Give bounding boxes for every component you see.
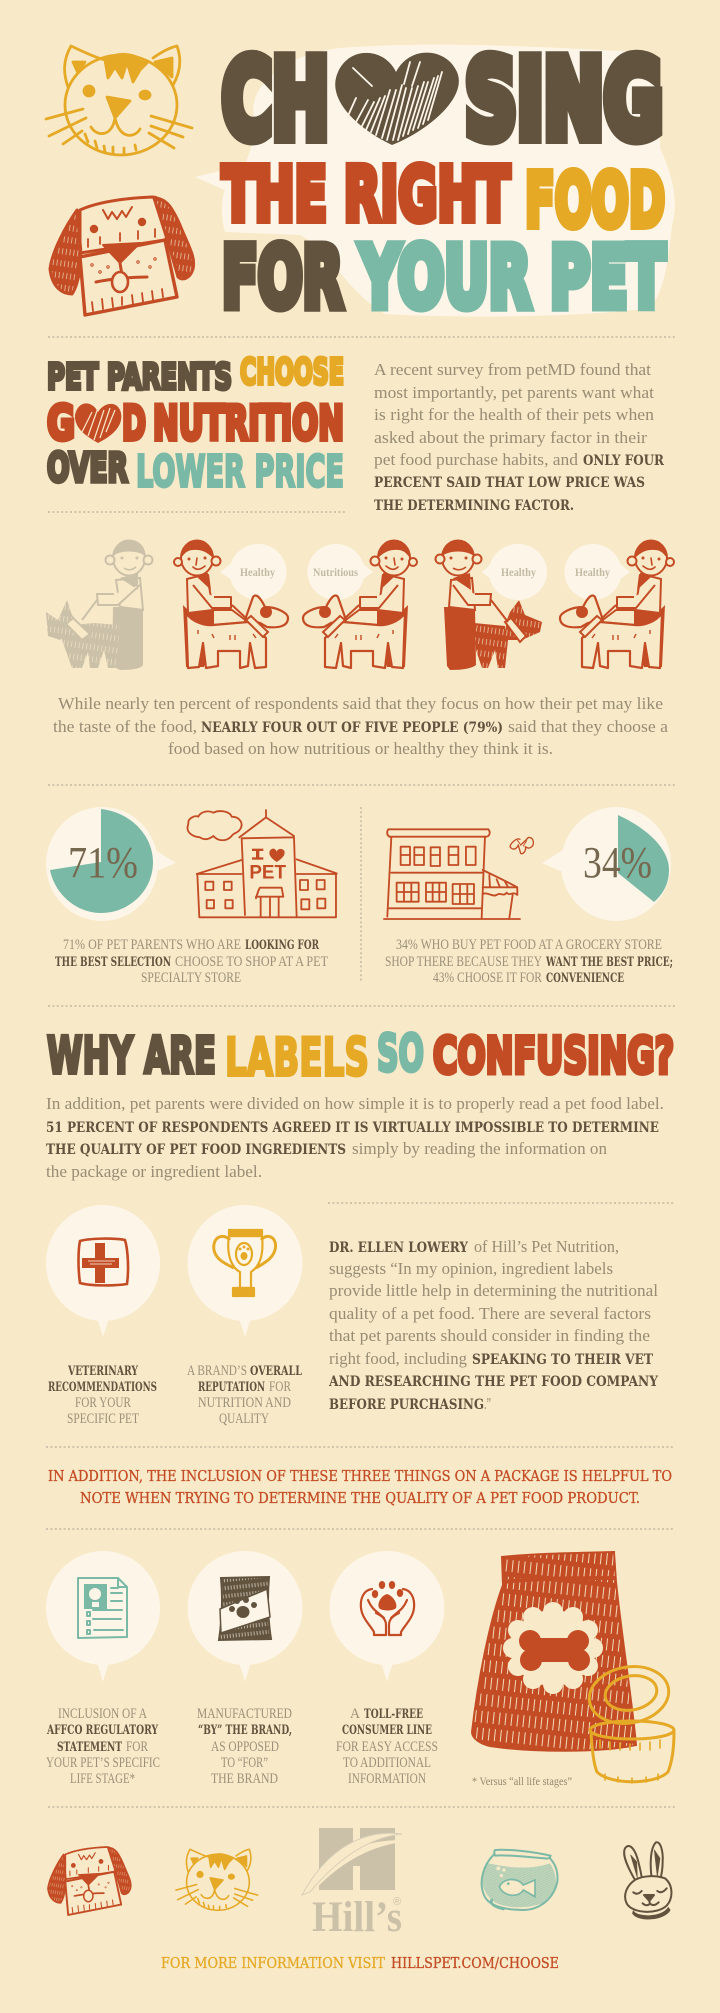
footer link: FOR MORE INFORMATION VISIT — [161, 1956, 385, 1972]
caption: 34 percent: SHOP THERE BECAUSE THEY — [385, 954, 542, 970]
heading: why are labels so confusing: LABELS — [225, 1028, 369, 1088]
icon: fish bowl — [482, 1850, 558, 1910]
heading: pet parents choose good nutrition: LOWER PRICE — [136, 446, 344, 498]
figure: person with dark dog and speech bubble healthy: Healthy — [501, 565, 536, 579]
icon: bone — [519, 1630, 590, 1671]
icon: rabbit — [624, 1842, 671, 1919]
paragraph: labels: simply by reading the information on — [352, 1139, 607, 1158]
caption: manufactured: THE BRAND — [211, 1771, 278, 1787]
caption: brand reputation: REPUTATION — [198, 1380, 265, 1395]
caption: toll-free — [336, 1706, 438, 1787]
caption: brand reputation: QUALITY — [219, 1411, 269, 1427]
caption: toll-free: INFORMATION — [348, 1771, 426, 1787]
icon: hands and paw — [361, 1581, 414, 1635]
paragraph: four out of five: said that they choose a — [508, 717, 668, 736]
quote: Dr. Ellen Lowery: AND RESEARCHING THE PET FOOD COMPANY — [328, 1374, 659, 1390]
figure: grey person with dog — [46, 540, 152, 670]
quote: Dr. Ellen Lowery: BEFORE PURCHASING — [329, 1397, 484, 1413]
paragraph: labels — [46, 1094, 664, 1181]
caption: brand reputation: OVERALL — [250, 1364, 302, 1379]
caption: veterinary: FOR YOUR — [75, 1395, 131, 1411]
caption: veterinary — [48, 1364, 157, 1427]
caption: manufactured: MANUFACTURED — [197, 1706, 292, 1722]
paragraph: labels: THE QUALITY OF PET FOOD INGREDIENTS — [46, 1142, 346, 1158]
quote: Dr. Ellen Lowery: provide little help in determining the nutritional — [329, 1281, 658, 1300]
logo: Hill's: Hill’s — [312, 1894, 402, 1941]
footer link — [161, 1956, 559, 1972]
caption: manufactured — [197, 1706, 292, 1787]
quote: Dr. Ellen Lowery: quality of a pet food. There are several factors — [329, 1304, 651, 1323]
figure: person, dog and speech bubble healthy: Healthy — [240, 565, 275, 579]
caption: 71 percent: 71% OF PET PARENTS WHO ARE — [63, 937, 241, 953]
caption: brand reputation: A BRAND’S — [187, 1363, 247, 1379]
callout: three things on a package — [48, 1469, 672, 1507]
bubble: veterinary recommendations — [46, 1205, 160, 1337]
pie chart: 34 percent — [542, 807, 671, 921]
caption: 71 percent: LOOKING FOR — [245, 938, 319, 953]
icon: can — [585, 1660, 674, 1783]
caption: 71 percent: CHOOSE TO SHOP AT A PET — [175, 954, 328, 970]
caption: 34 percent: 34% WHO BUY PET FOOD AT A GROCERY STORE — [396, 937, 662, 953]
bubble: toll-free consumer line — [330, 1551, 444, 1682]
caption: 34 percent: CONVENIENCE — [546, 971, 624, 986]
caption: toll-free: TO ADDITIONAL — [343, 1755, 431, 1771]
quote: Dr. Ellen Lowery — [328, 1237, 659, 1413]
paragraph: four out of five: food based on how nutritious or healthy they think it is. — [168, 739, 553, 758]
quote: Dr. Ellen Lowery: of Hill’s Pet Nutrition, — [474, 1237, 619, 1256]
caption: toll-free: A — [350, 1706, 360, 1722]
caption: brand reputation — [187, 1363, 302, 1427]
heading: pet parents choose good nutrition: PET PARENTS — [47, 357, 232, 398]
heading: pet parents choose good nutrition: NUTRITION — [153, 396, 344, 452]
icon: dog face — [50, 197, 194, 315]
quote: Dr. Ellen Lowery: right food, including — [329, 1349, 467, 1368]
title: FOR — [222, 228, 343, 326]
figure: person, dog and speech bubble nutritious — [303, 540, 417, 668]
illustration: pet food bag and can — [472, 1552, 674, 1783]
caption: toll-free: CONSUMER LINE — [342, 1723, 432, 1738]
caption: 71 percent — [55, 937, 328, 986]
intro paragraph: asked about the primary factor in their — [374, 428, 647, 447]
caption: 34 percent: 43% CHOOSE IT FOR — [433, 970, 542, 986]
intro paragraph — [374, 360, 664, 514]
intro paragraph: A recent survey from petMD found that — [374, 360, 651, 379]
caption: affco — [46, 1706, 160, 1787]
caption: affco: AFFCO REGULATORY — [46, 1723, 159, 1738]
caption: affco: LIFE STAGE* — [70, 1771, 135, 1787]
paragraph: four out of five: While nearly ten percent of respondents said that they focus on how their pet may like — [58, 694, 663, 713]
icon: cat small — [176, 1849, 258, 1910]
logo: Hill's: ® — [393, 1896, 401, 1908]
heading: pet parents choose good nutrition: G — [47, 396, 75, 452]
intro paragraph: THE DETERMINING FACTOR. — [374, 498, 574, 514]
figure: person, dog and speech bubble healthy — [174, 540, 288, 668]
caption: manufactured: TO “FOR” — [221, 1755, 268, 1771]
figure: person, dog and speech bubble healthy, facing left: Healthy — [575, 565, 610, 579]
heading: pet parents choose good nutrition: CHOOSE — [240, 352, 344, 393]
figure: person, dog and speech bubble nutritious: Nutritious — [313, 565, 358, 579]
paragraph: four out of five: the taste of the food, — [53, 717, 197, 736]
caption: manufactured: “BY” THE BRAND, — [198, 1723, 292, 1738]
caption: toll-free: FOR EASY ACCESS — [336, 1739, 438, 1755]
intro paragraph: is right for the health of their pets when — [374, 405, 655, 424]
caption: 34 percent — [385, 937, 673, 986]
footnote: * Versus “all life stages” — [472, 1774, 572, 1788]
icon: heart letter O — [335, 53, 459, 145]
caption: veterinary: SPECIFIC PET — [67, 1411, 139, 1427]
logo: Hill's — [302, 1828, 416, 1941]
title — [222, 38, 665, 326]
icon: food bag — [219, 1577, 271, 1640]
footer link: HILLSPET.COM/CHOOSE — [391, 1956, 559, 1972]
caption: 71 percent: THE BEST SELECTION — [55, 955, 171, 970]
paragraph: four out of five: NEARLY FOUR OUT OF FIVE PEOPLE (79%) — [201, 720, 503, 736]
title: THE RIGHT — [222, 152, 510, 238]
pie chart: 34 percent: 34% — [583, 838, 652, 887]
icon: heart letters OO — [75, 403, 121, 443]
bubble: regulatory statement — [46, 1551, 160, 1682]
icon: pet specialty store with cloud — [187, 810, 337, 917]
caption: affco: YOUR PET’S SPECIFIC — [46, 1755, 160, 1771]
icon: grocery store with butterfly — [384, 829, 533, 919]
scalloped label — [503, 1602, 603, 1694]
figure: person with dark dog and speech bubble healthy — [436, 540, 547, 670]
caption: brand reputation: FOR — [269, 1379, 291, 1395]
paragraph: labels: the package or ingredient label. — [46, 1162, 262, 1181]
heading: pet parents choose good nutrition: OVER — [47, 444, 128, 492]
quote: Dr. Ellen Lowery: SPEAKING TO THEIR VET — [472, 1352, 654, 1368]
icon: trophy — [214, 1230, 276, 1296]
quote: Dr. Ellen Lowery: that pet parents should consider in finding the — [329, 1326, 650, 1345]
heading: why are labels so confusing — [47, 1025, 674, 1088]
pictogram row: people and dogs — [46, 540, 674, 670]
pie chart: 71 percent: 71% — [68, 838, 138, 887]
intro paragraph: ONLY FOUR — [583, 453, 664, 469]
icon: pet specialty store with cloud: PET — [249, 863, 286, 884]
caption: brand reputation: NUTRITION AND — [198, 1395, 291, 1411]
caption: affco: INCLUSION OF A — [58, 1706, 147, 1722]
quote: Dr. Ellen Lowery: .” — [484, 1394, 491, 1413]
heading: why are labels so confusing: SO — [377, 1025, 424, 1084]
caption: veterinary: VETERINARY — [67, 1364, 139, 1379]
intro paragraph: pet food purchase habits, and — [374, 450, 579, 469]
quote: Dr. Ellen Lowery: suggests “In my opinion, ingredient labels — [329, 1259, 613, 1278]
icon: dog small — [48, 1847, 131, 1915]
icon: medical cross — [78, 1239, 128, 1285]
callout: three things on a package: NOTE WHEN TRYING TO DETERMINE THE QUALITY OF A PET FOOD PRODUCT. — [80, 1491, 640, 1507]
paragraph: four out of five — [53, 694, 668, 758]
figure: person, dog and speech bubble healthy, facing left — [560, 540, 674, 668]
bubble: overall reputation — [188, 1205, 302, 1337]
intro paragraph: most importantly, pet parents want what — [374, 383, 654, 402]
pie chart: 71 percent — [46, 807, 176, 921]
icon: cat face — [46, 46, 192, 155]
heading: pet parents choose good nutrition — [47, 352, 344, 498]
caption: manufactured: AS OPPOSED — [211, 1739, 279, 1755]
title: CH — [222, 38, 329, 163]
bubble: manufactured by the brand — [188, 1551, 302, 1682]
intro paragraph: PERCENT SAID THAT LOW PRICE WAS — [374, 475, 645, 491]
title speech blob — [195, 45, 675, 316]
heading: why are labels so confusing: WHY ARE — [47, 1027, 216, 1086]
quote: Dr. Ellen Lowery: DR. ELLEN LOWERY — [329, 1240, 469, 1256]
caption: toll-free: TOLL-FREE — [364, 1707, 423, 1722]
caption: veterinary: RECOMMENDATIONS — [48, 1380, 157, 1395]
caption: affco: FOR — [126, 1739, 148, 1755]
caption: 71 percent: SPECIALTY STORE — [141, 970, 241, 986]
paragraph: labels: In addition, pet parents were divided on how simple it is to properly read a pet food label. — [46, 1094, 664, 1113]
icon: document — [78, 1578, 127, 1638]
heading: pet parents choose good nutrition: D — [122, 396, 146, 452]
caption: affco: STATEMENT — [57, 1740, 122, 1755]
